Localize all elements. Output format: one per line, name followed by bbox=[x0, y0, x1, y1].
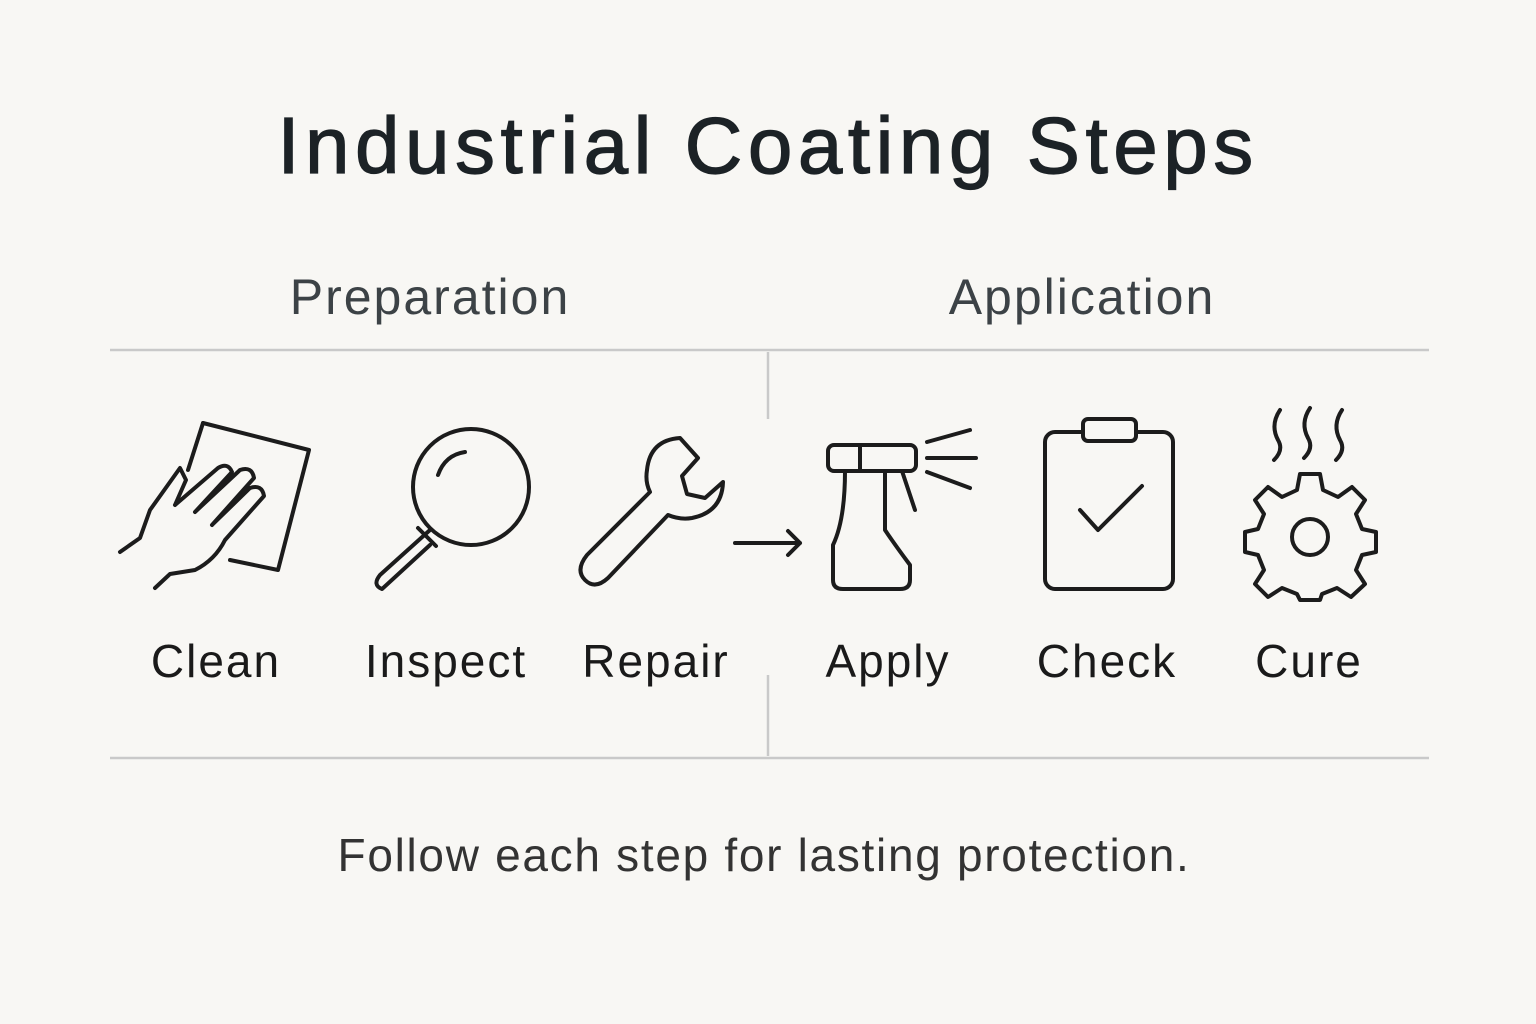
heading: Preparation: Preparation bbox=[290, 269, 570, 325]
label: Check: Check bbox=[1037, 635, 1177, 687]
label: Inspect: Inspect bbox=[365, 635, 527, 687]
title: Industrial Coating Steps bbox=[277, 101, 1259, 190]
icon: hand with cloth bbox=[120, 423, 309, 588]
arrow bbox=[735, 531, 800, 555]
icon: clipboard bbox=[1045, 419, 1173, 589]
footer text: Follow each step for lasting protection. bbox=[338, 829, 1190, 881]
icon: wrench bbox=[580, 438, 723, 585]
label: Clean: Clean bbox=[151, 635, 281, 687]
label: Apply: Apply bbox=[825, 635, 951, 687]
icon: spray bottle bbox=[828, 430, 976, 589]
label: Cure: Cure bbox=[1255, 635, 1363, 687]
icon: magnifier bbox=[376, 429, 529, 589]
icon: gear with heat bbox=[1245, 408, 1376, 600]
label: Repair: Repair bbox=[582, 635, 730, 687]
heading: Application: Application bbox=[949, 269, 1215, 325]
